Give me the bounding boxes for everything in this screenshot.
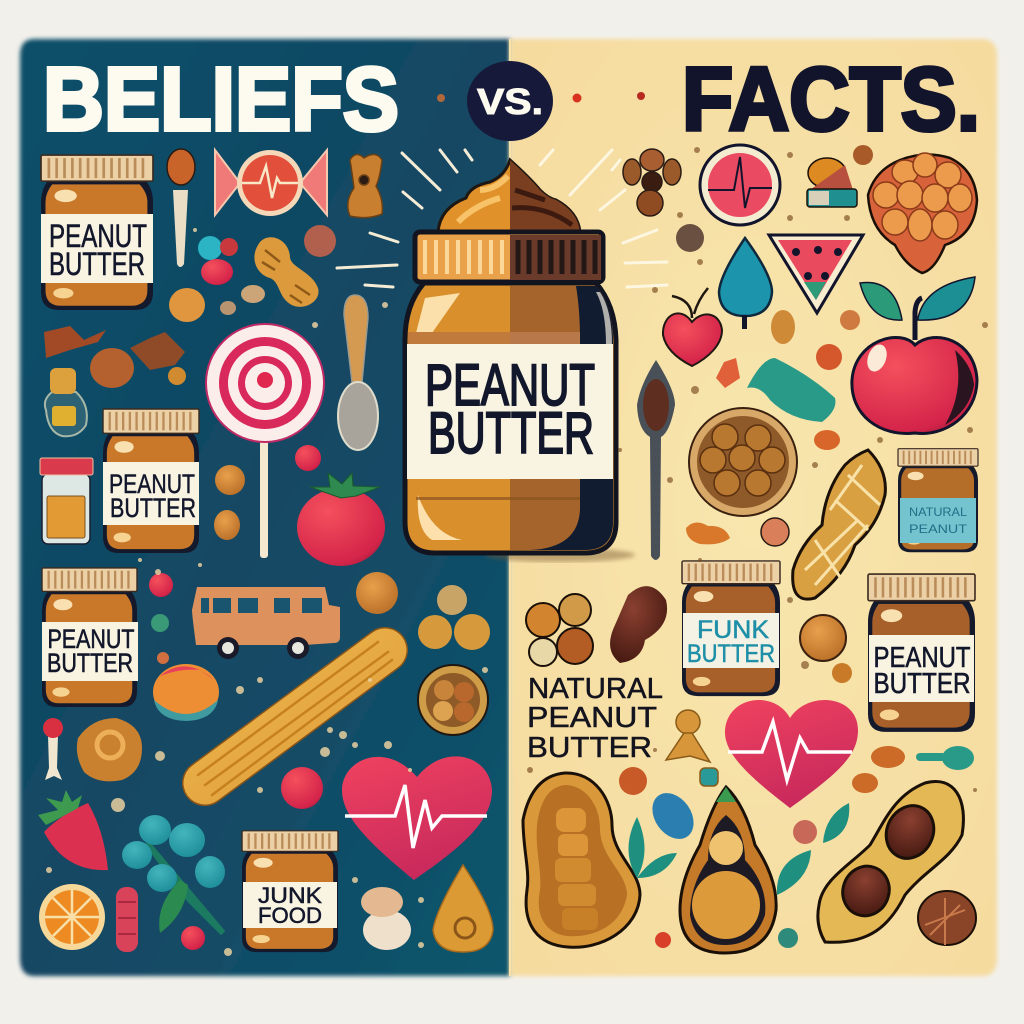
left: colourful candies bbox=[149, 225, 490, 950]
badge: vs. bbox=[467, 61, 553, 141]
spoon and wand bbox=[167, 149, 195, 267]
right: jar with blurred label bbox=[898, 449, 978, 552]
heart left bbox=[342, 756, 492, 880]
bus bbox=[192, 587, 340, 659]
right: round nuts bbox=[619, 224, 974, 948]
heading: beliefs: BELIEFS bbox=[43, 50, 399, 150]
right: teal leaves bbox=[628, 803, 849, 895]
candy with pulse bbox=[215, 150, 327, 216]
round cookie bbox=[418, 665, 488, 735]
right: brain-like nut bbox=[868, 153, 977, 273]
lollipop bbox=[205, 323, 325, 558]
badge: vs.: VS. bbox=[477, 81, 543, 122]
right: heart bbox=[725, 700, 858, 808]
jar lid bbox=[415, 232, 603, 282]
left: jar peanut butter 1: BUTTER bbox=[49, 246, 145, 282]
right: mixed foods bbox=[807, 145, 873, 207]
right: natural peanut butter text: BUTTER bbox=[527, 732, 652, 764]
right: large apple bbox=[852, 277, 977, 433]
bone bbox=[43, 718, 63, 780]
left: jar peanut butter 2: BUTTER bbox=[110, 493, 196, 523]
left: jar peanut butter 3 bbox=[42, 568, 138, 707]
right: small apple bbox=[663, 288, 722, 366]
rays around main jar bbox=[337, 150, 667, 287]
right: hazelnuts bbox=[526, 594, 593, 666]
orange slice bbox=[39, 884, 105, 950]
right: dark nut bbox=[610, 586, 667, 663]
bread roll bbox=[153, 664, 219, 721]
right: pulse badge bbox=[700, 145, 780, 225]
right: avocado with nut butter bbox=[680, 787, 776, 953]
right: blue candy bbox=[644, 785, 702, 847]
shadow under main jar bbox=[485, 548, 635, 562]
right speckles bbox=[527, 147, 988, 792]
peanut butter swirl bbox=[438, 160, 580, 232]
mushrooms bbox=[361, 887, 411, 950]
jar label bbox=[407, 344, 613, 479]
right: green leaf bbox=[747, 358, 835, 422]
left: small bottle bbox=[45, 368, 87, 436]
jar label: PEANUT bbox=[425, 353, 595, 418]
left: jar junk food: JUNK bbox=[258, 883, 322, 908]
spoon silver bbox=[338, 295, 378, 450]
right: natural peanut butter text: NATURAL bbox=[528, 673, 663, 705]
main jar: peanut butter bbox=[405, 160, 616, 553]
left: jar peanut butter 2 bbox=[103, 409, 199, 553]
right: spoon bbox=[637, 360, 675, 560]
left: jar peanut butter 3: PEANUT bbox=[48, 624, 134, 654]
capsule bbox=[116, 887, 138, 952]
right: jar peanut butter: PEANUT bbox=[874, 642, 971, 674]
right: peanut shell with brown kernels bbox=[818, 782, 963, 942]
long peanut bar bbox=[198, 642, 392, 795]
tomato bbox=[297, 473, 385, 566]
right: jar funk butter bbox=[682, 561, 780, 696]
right: walnut bbox=[918, 891, 976, 945]
right: jar funk butter: FUNK bbox=[697, 616, 769, 644]
left: nut cluster bbox=[44, 326, 186, 388]
left: jar peanut butter 1 bbox=[41, 155, 153, 310]
right: water drop bbox=[719, 238, 772, 329]
left: small jar bbox=[40, 458, 93, 544]
right: jar with blurred label: NATURAL bbox=[909, 505, 967, 519]
left: peanut bbox=[254, 237, 319, 307]
panel: facts background bbox=[510, 39, 997, 976]
right: bowl of nuts bbox=[689, 408, 797, 516]
right: gummy figure bbox=[666, 710, 718, 786]
right: natural peanut butter text: PEANUT bbox=[527, 702, 657, 734]
left speckles bbox=[46, 228, 488, 956]
right: nut cluster top bbox=[623, 149, 681, 216]
right: watermelon bbox=[769, 235, 863, 313]
bun bbox=[77, 718, 142, 781]
strawberry bbox=[38, 790, 108, 870]
jar label: BUTTER bbox=[428, 401, 594, 466]
jar glass body bbox=[405, 283, 616, 553]
panel: beliefs background bbox=[20, 39, 510, 976]
teal plant bbox=[122, 815, 225, 933]
left: jar junk food bbox=[242, 831, 338, 952]
left: jar peanut butter 1: PEANUT bbox=[49, 218, 147, 254]
right: jar funk butter: BUTTER bbox=[687, 640, 775, 668]
right: peanut shell waffle bbox=[793, 450, 885, 599]
oil drop bbox=[433, 865, 493, 952]
heading: facts: FACTS. bbox=[682, 50, 980, 150]
right: jar peanut butter bbox=[868, 574, 975, 732]
red dots by heading bbox=[437, 92, 645, 102]
left: jar peanut butter 3: BUTTER bbox=[47, 648, 133, 678]
left: jar peanut butter 2: PEANUT bbox=[109, 469, 195, 499]
right: jar with blurred label: PEANUT bbox=[909, 522, 968, 536]
right: jar peanut butter: BUTTER bbox=[874, 668, 970, 700]
right: natural peanut butter text bbox=[527, 673, 663, 764]
left: jar junk food: FOOD bbox=[258, 903, 322, 928]
gummy bear bbox=[348, 154, 382, 218]
right: peanut shell with kernels bbox=[523, 773, 640, 947]
